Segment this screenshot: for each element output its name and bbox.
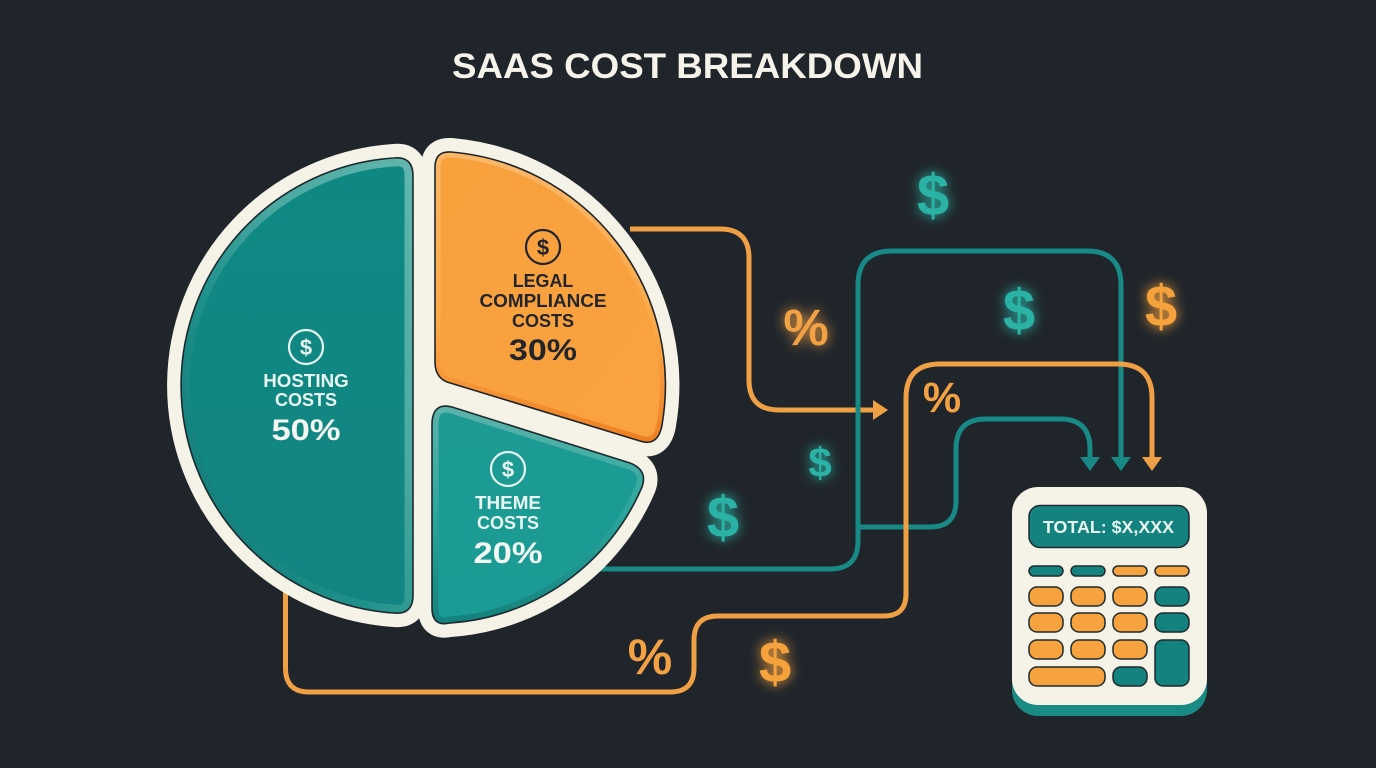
label: legal compliance costs xyxy=(480,270,606,367)
label: theme costs: 20% xyxy=(474,537,542,570)
calculator display: TOTAL: $X,XXX xyxy=(1043,517,1174,537)
label: theme costs xyxy=(474,492,542,570)
icon: floating dollar signs: $ xyxy=(1145,274,1177,339)
panel: hosting costs slice xyxy=(181,158,413,613)
panel: theme costs slice xyxy=(432,406,644,624)
calculator base xyxy=(1012,520,1207,716)
icon: dollar coin xyxy=(289,330,323,364)
icon: floating dollar signs: $ xyxy=(917,163,949,228)
icon: floating dollar signs: $ xyxy=(759,630,791,695)
label: theme costs: COSTS xyxy=(477,512,539,533)
label: legal compliance costs: LEGAL xyxy=(513,270,573,291)
arrow: legal costs to flow line xyxy=(630,229,888,420)
label: hosting costs: HOSTING xyxy=(263,370,349,391)
icon: floating dollar signs: $ xyxy=(707,485,739,550)
label: legal compliance costs: COMPLIANCE xyxy=(480,290,606,311)
icon: dollar coin xyxy=(526,230,560,264)
icon: dollar coin: $ xyxy=(537,235,549,260)
icon: floating dollar signs xyxy=(707,163,1177,695)
icon: floating dollar signs: $ xyxy=(808,439,832,486)
pie cream backing xyxy=(181,152,665,624)
icon: floating percent signs: % xyxy=(628,629,672,685)
calculator body xyxy=(1012,487,1207,705)
label: hosting costs: 50% xyxy=(272,414,340,447)
icon: floating percent signs xyxy=(628,299,961,685)
icon: dollar coin xyxy=(491,452,525,486)
label: hosting costs: COSTS xyxy=(275,389,337,410)
icon: dollar coin: $ xyxy=(502,457,514,482)
arrow: hosting costs to calculator xyxy=(286,364,1162,692)
label: theme costs: THEME xyxy=(475,492,541,513)
label: legal compliance costs: COSTS xyxy=(512,310,574,331)
icon: floating percent signs: % xyxy=(783,299,829,356)
calculator xyxy=(1012,487,1207,716)
arrow: theme costs to calculator xyxy=(590,251,1131,569)
arrow: side branch to calculator xyxy=(858,419,1100,527)
pie chart xyxy=(181,152,665,624)
icon: floating percent signs: % xyxy=(923,374,961,422)
icon: floating dollar signs: $ xyxy=(1003,278,1035,343)
label: hosting costs xyxy=(263,370,349,447)
label: legal compliance costs: 30% xyxy=(509,334,577,367)
title: SAAS COST BREAKDOWN xyxy=(452,47,923,86)
calculator display xyxy=(1029,506,1189,548)
panel: legal compliance costs slice xyxy=(435,152,665,442)
icon: dollar coin: $ xyxy=(300,335,312,360)
calculator keys xyxy=(1029,566,1189,686)
